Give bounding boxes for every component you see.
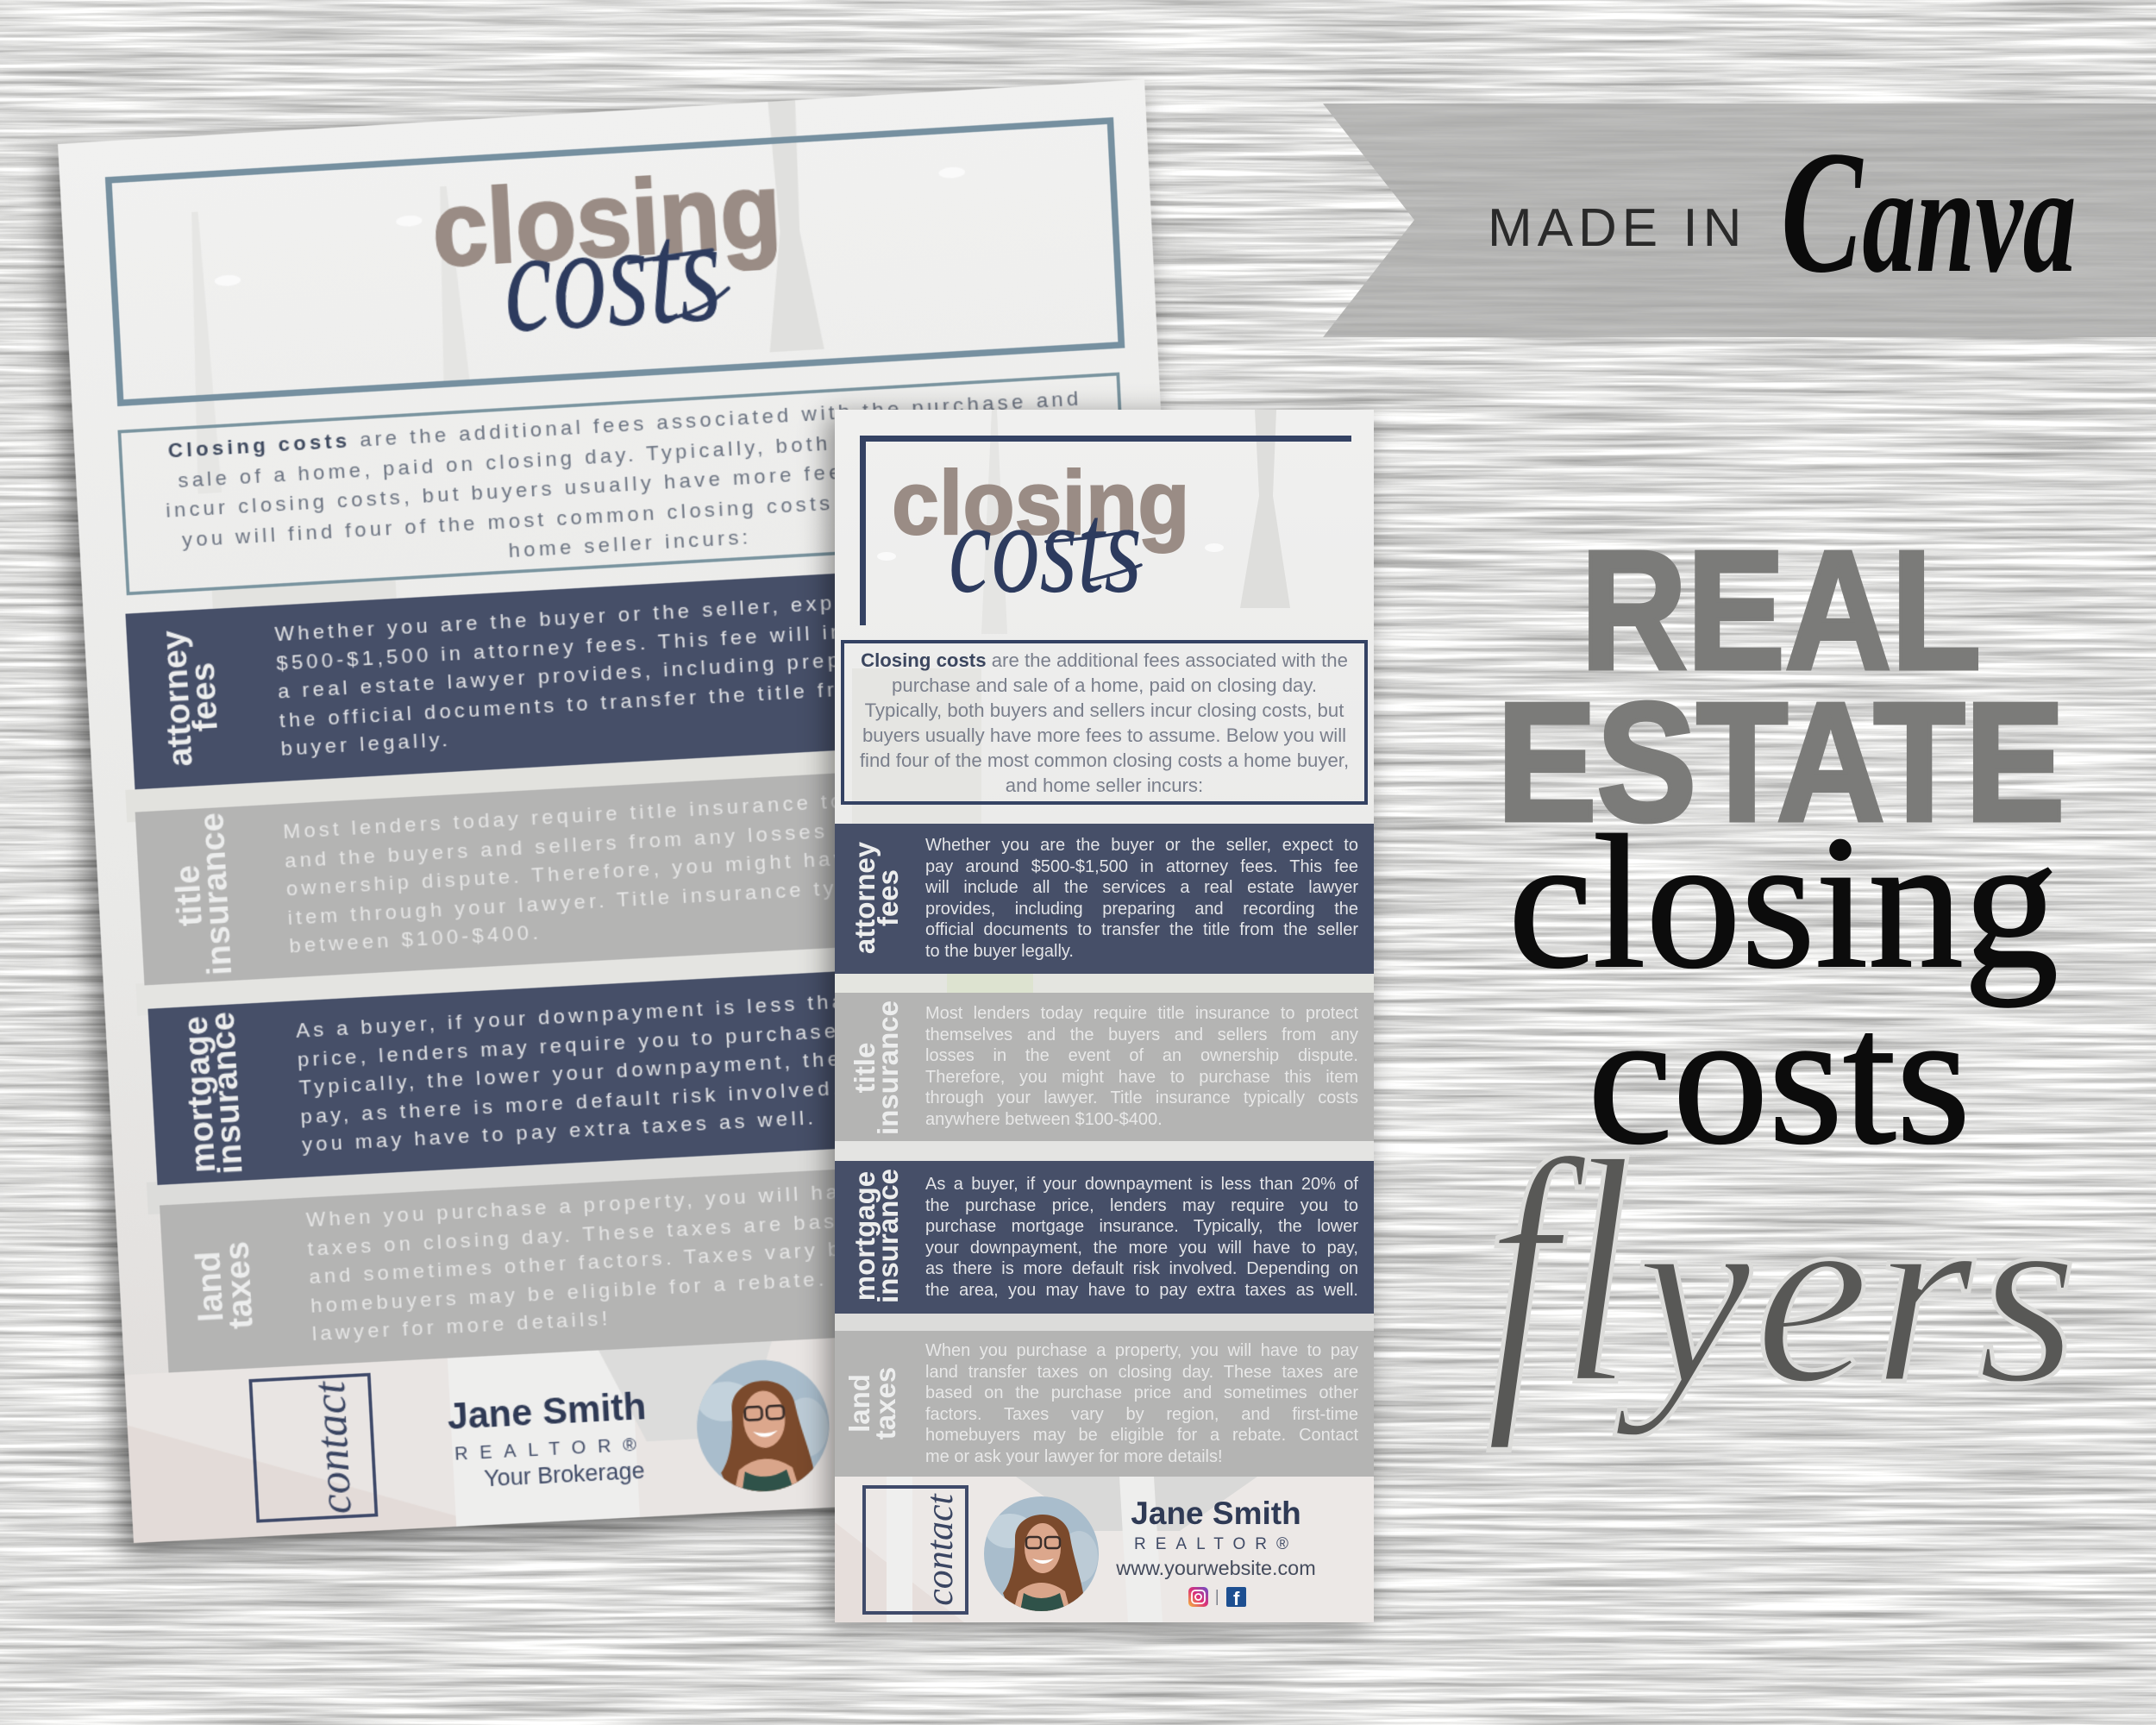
flourish strokes on costs [1044, 530, 1143, 581]
body text: item through your lawyer. Title insurance typically costs anywhere [287, 862, 1125, 930]
body text: Typically, the lower your downpayment, the more you will have to [298, 1033, 1123, 1100]
body text [296, 975, 1148, 1157]
contact script: contact [305, 1380, 361, 1515]
title: closing: closing [429, 149, 784, 289]
body text: As a buyer, if your downpayment is less than 20% of the purchase [296, 975, 1131, 1043]
heading: flyers [1486, 1093, 2081, 1452]
body text: When you purchase a property, you will have to pay [925, 1341, 1358, 1360]
body text: me or ask your lawyer for more details! [925, 1447, 1223, 1466]
label: mortgage [175, 1015, 222, 1174]
intro text: find four of the most common closing costs a home buyer, [860, 750, 1349, 771]
intro text: incur closing costs, but buyers usually have more fees to assume. Below [166, 447, 1091, 523]
realtor: REALTOR® [454, 1433, 649, 1465]
body text: ownership dispute. Therefore, you might have to purchase this [285, 835, 1077, 901]
label: attorney [154, 630, 199, 768]
label [849, 842, 904, 954]
agent name: Jane Smith [446, 1387, 647, 1438]
label: taxes [869, 1367, 901, 1440]
banner text: made in: MADE IN [1488, 198, 1746, 258]
body text: pay around $500-$1,500 in attorney fees. This fee [925, 857, 1358, 876]
label: attorney [849, 842, 881, 954]
intro text: sale of a home, paid on closing day. Typically, both buyers and sellers [178, 418, 1075, 492]
body text [283, 776, 1125, 958]
realtor: REALTOR® [1134, 1535, 1298, 1553]
body text [925, 1004, 1358, 1128]
ribbon banner [1323, 104, 2156, 337]
label: land [843, 1374, 875, 1433]
body text [925, 836, 1358, 961]
label: fees [872, 869, 904, 926]
website: www.yourwebsite.com [1116, 1557, 1316, 1579]
body text: taxes on closing day. These taxes are based on the purchase price [307, 1194, 1153, 1261]
bar: attorney fees [125, 555, 1177, 789]
label: insurance [202, 1011, 249, 1176]
heading: estate: ESTATE [1497, 668, 2065, 856]
label [849, 1169, 904, 1303]
body text: provides, including preparing and recording the [925, 899, 1358, 918]
body text: as there is more default risk involved. Depending on [925, 1259, 1358, 1278]
title frame [105, 117, 1125, 406]
heading: flyers: f [1486, 1093, 1561, 1451]
agent name: Jane Smith [1131, 1496, 1301, 1531]
body text: and sometimes other factors. Taxes vary by region, and first-time [309, 1223, 1135, 1289]
bar: attorney fees [835, 824, 1374, 974]
bar: land taxes [835, 1331, 1374, 1477]
label: taxes [216, 1240, 260, 1330]
banner logo: Canva: Canva [1781, 114, 2077, 309]
label [154, 630, 225, 768]
contact box [862, 1485, 968, 1615]
heading: closing: closing [1508, 796, 2059, 1007]
label [188, 1240, 260, 1330]
intro text: Typically, both buyers and sellers incur closing costs, but [865, 699, 1344, 721]
label: land [188, 1251, 230, 1323]
bar: title insurance [135, 755, 1187, 985]
body text: the purchase price, lenders may require you to [925, 1195, 1358, 1214]
intro box [841, 640, 1368, 805]
panel: large tilted flyer [58, 79, 1214, 1543]
heading: real: REAL [1581, 516, 1981, 705]
icon: instagram and facebook [1188, 1587, 1247, 1608]
body text: land transfer taxes on closing day. These taxes are [925, 1363, 1358, 1382]
body text: your downpayment, the more you will have to pay, [925, 1239, 1358, 1258]
contact box [248, 1373, 378, 1523]
label: title [167, 864, 210, 927]
body text [925, 1175, 1358, 1299]
body text [274, 580, 1119, 762]
body text [305, 1166, 1153, 1346]
panel: upright rack card flyer [835, 410, 1374, 1622]
body text: you may have to pay extra taxes as well. [302, 1107, 818, 1157]
title: costs: costs [949, 476, 1142, 620]
title: closing: closing [892, 453, 1190, 554]
intro text: buyers usually have more fees to assume. Below you will [862, 724, 1346, 746]
label: title [849, 1043, 881, 1093]
body text: through your lawyer. Title insurance typically costs [925, 1088, 1358, 1107]
intro text [860, 649, 1349, 796]
body text: between $100-$400. [289, 922, 542, 958]
bar: land taxes [160, 1151, 1206, 1372]
label: insurance [191, 812, 239, 976]
title corner frame [860, 436, 1351, 625]
body text: homebuyers may be eligible for a rebate. Contact [925, 1426, 1358, 1445]
heading: flyers: yers [1636, 1151, 2081, 1437]
intro text: home seller incurs: [508, 526, 752, 562]
heading: flyers: l [1561, 1093, 1636, 1451]
label [175, 1011, 249, 1176]
body text: lawyer for more details! [311, 1308, 611, 1346]
body text: As a buyer, if your downpayment is less than 20% of [925, 1175, 1358, 1194]
label: mortgage [849, 1171, 881, 1301]
body text: official documents to transfer the title from the seller [925, 920, 1358, 939]
intro text [166, 387, 1091, 562]
body text: Therefore, you might have to purchase this item [925, 1068, 1358, 1087]
body text [925, 1340, 1358, 1467]
bar: mortgage insurance [835, 1161, 1374, 1314]
flourish strokes on costs [626, 248, 731, 320]
intro text: you will find four of the most common closing costs a home buyer, and [181, 478, 1078, 551]
body text: purchase mortgage insurance. Typically, the lower [925, 1217, 1358, 1236]
intro text: and home seller incurs: [1006, 775, 1203, 796]
intro text: Closing costs are the additional fees associated with the purchase and [167, 387, 1082, 463]
body text: factors. Taxes vary by region, and first-time [925, 1404, 1358, 1423]
label [843, 1367, 901, 1440]
body text: will include all the services a real estate lawyer [925, 878, 1358, 897]
brokerage: Your Brokerage [484, 1458, 645, 1492]
body text: the area, you may have to pay extra taxes as well. [925, 1280, 1358, 1299]
body text: buyer legally. [280, 729, 452, 762]
body text: $500-$1,500 in attorney fees. This fee will include all the services [276, 605, 1119, 675]
body text: to the buyer legally. [925, 942, 1074, 961]
bar: mortgage insurance [147, 952, 1196, 1185]
body text: pay, as there is more default risk involved. Depending on the area, [300, 1061, 1148, 1129]
agent photo [984, 1496, 1099, 1611]
label: insurance [872, 1169, 904, 1303]
body text: a real estate lawyer provides, including preparing and recording [278, 636, 1091, 704]
title: costs: costs [499, 188, 725, 363]
body text: based on the purchase price and sometimes other [925, 1383, 1358, 1402]
body text: When you purchase a property, you will have to pay land transfer [305, 1166, 1130, 1232]
body text: Whether you are the buyer or the seller, expect to pay around [274, 580, 1057, 646]
body text: Most lenders today require title insurance to protect themselves [283, 776, 1094, 844]
intro text: Closing costs are the additional fees associated with the [861, 649, 1348, 671]
intro text: purchase and sale of a home, paid on closing day. [892, 674, 1317, 696]
body text: Whether you are the buyer or the seller, expect to [925, 836, 1358, 855]
label: insurance [872, 1000, 904, 1135]
label: fees [182, 662, 225, 732]
contact script: contact [918, 1494, 961, 1606]
body text: losses in the event of an ownership dispute. [925, 1046, 1358, 1065]
label [849, 1000, 904, 1135]
agent photo [697, 1359, 830, 1492]
heading: costs: costs [1588, 972, 1971, 1184]
body text: homebuyers may be eligible for a rebate. Contact me or ask your [310, 1252, 1131, 1318]
body text: themselves and the buyers and sellers from any [925, 1025, 1358, 1044]
body text: price, lenders may require you to purchase mortgage insurance. [297, 1005, 1106, 1071]
label [167, 812, 239, 976]
body text: the official documents to transfer the title from the seller to the [279, 665, 1087, 732]
body text: and the buyers and sellers from any losses in the event of an [284, 807, 1062, 873]
bar: title insurance [835, 993, 1374, 1141]
intro box [117, 373, 1128, 595]
body text: Most lenders today require title insurance to protect [925, 1004, 1358, 1023]
body text: anywhere between $100-$400. [925, 1109, 1163, 1128]
